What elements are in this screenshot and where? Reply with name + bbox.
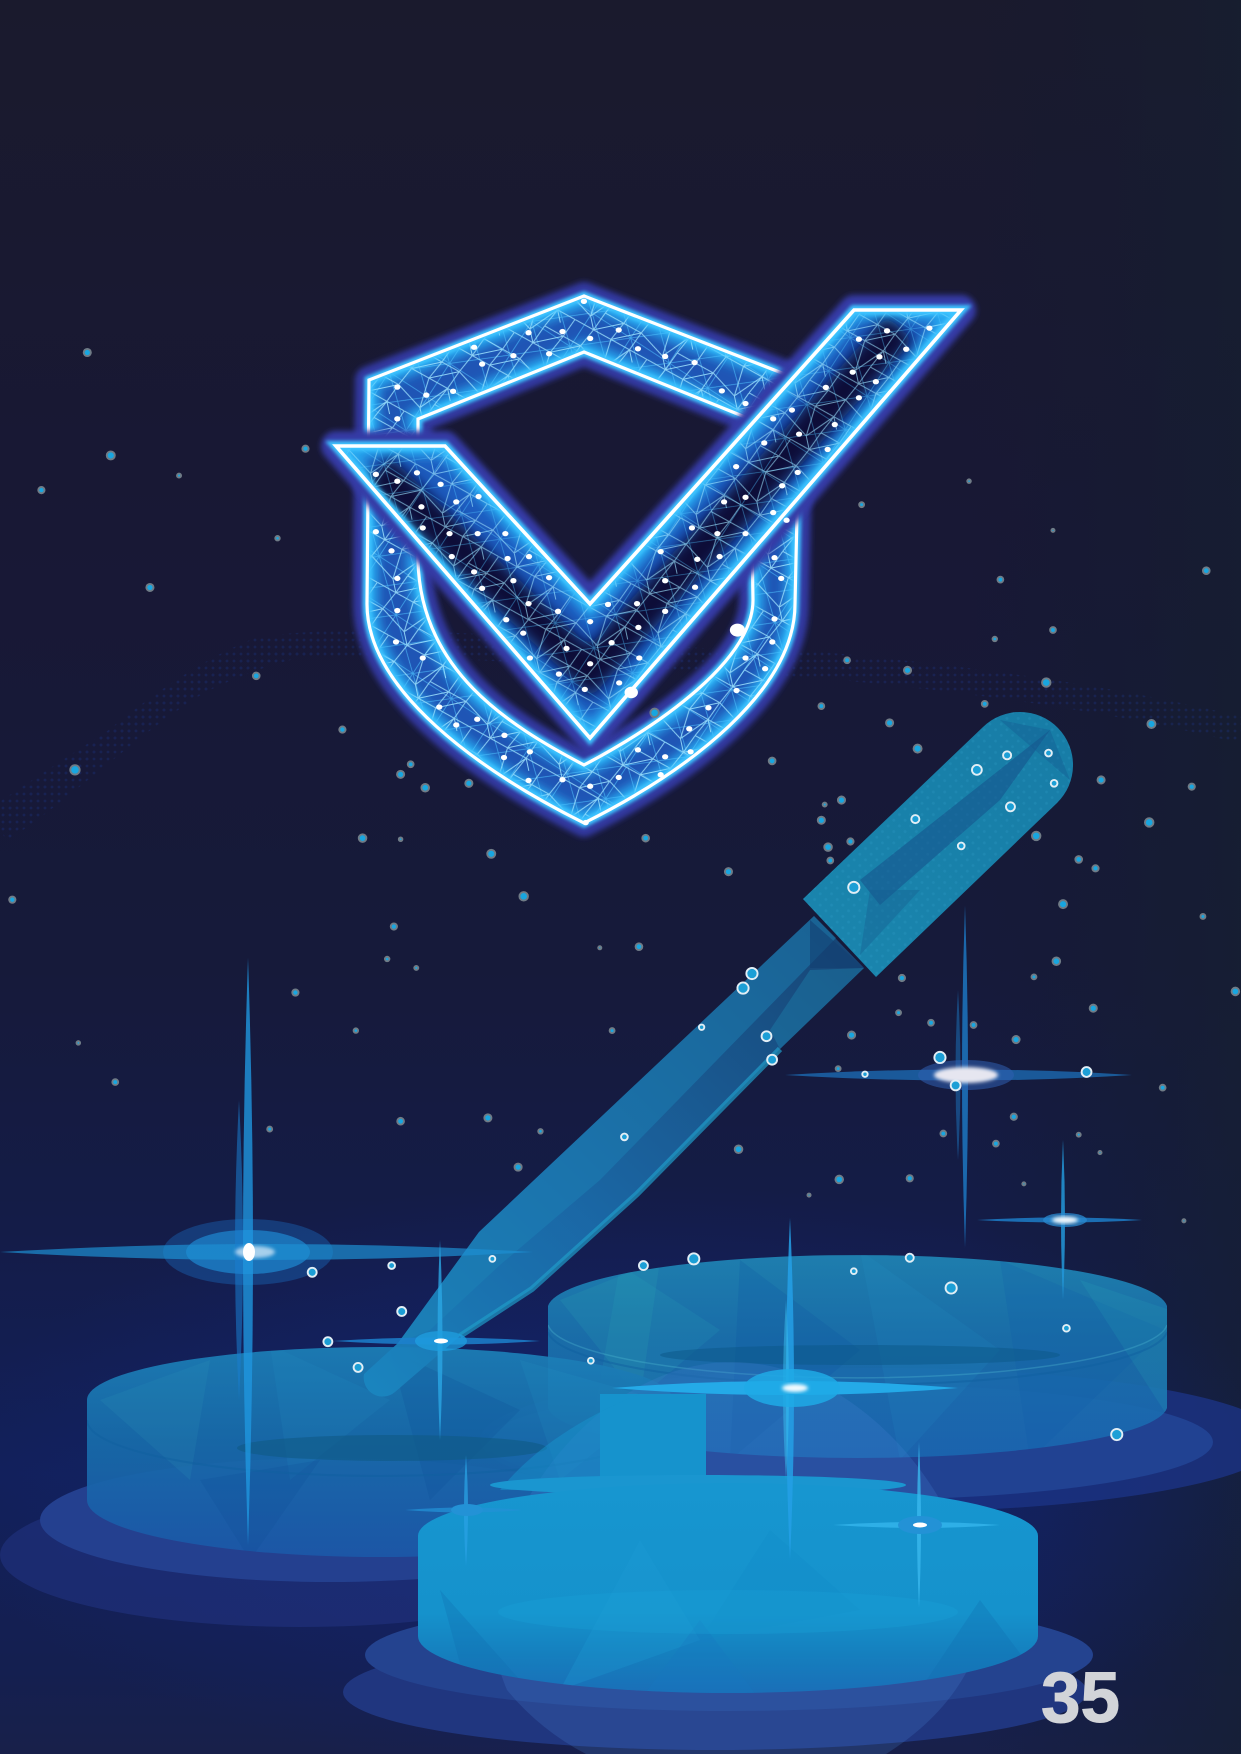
pipette stem: [364, 916, 864, 1397]
star: lower left small: [405, 1455, 523, 1567]
floating particles: [9, 349, 1239, 1222]
page number: 35: [1041, 1659, 1120, 1738]
star: lower right small: [833, 1442, 1000, 1608]
petri dish: front: [418, 1394, 1040, 1700]
faint large dome behind front dish: [493, 1362, 976, 1754]
sparkle stars: [0, 905, 1142, 1608]
check mark: [330, 300, 970, 745]
network nodes: [373, 299, 933, 825]
ground glow ellipses: [0, 1368, 1241, 1750]
dotted wave pattern: [0, 643, 1241, 830]
star: upper right: [785, 905, 1132, 1248]
pipette: [364, 712, 1073, 1397]
star: pipette tip: [333, 1240, 540, 1440]
pipette bulb: [803, 712, 1073, 977]
shield and check mark icon: [330, 280, 970, 840]
petri dish: left: [87, 1345, 673, 1560]
white ring bubbles: [308, 750, 1122, 1440]
star: right small: [977, 1140, 1142, 1300]
petri dish: back right: [548, 1250, 1170, 1460]
star: large left: [0, 958, 533, 1545]
star: center: [612, 1218, 958, 1560]
shield ring: [340, 280, 820, 840]
